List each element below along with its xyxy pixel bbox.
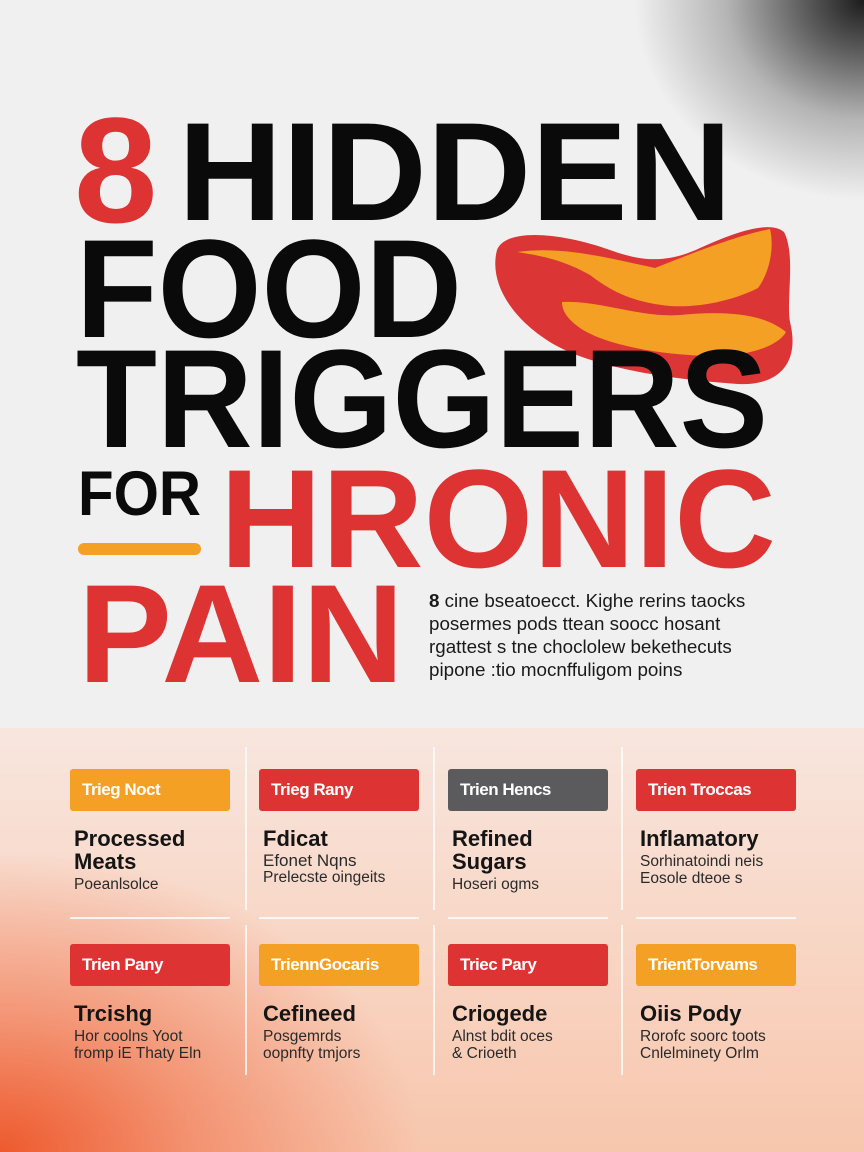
intro paragraph: posermes pods ttean soocc hosant (429, 613, 720, 634)
card 4 (636, 769, 796, 887)
card 1: Meats (74, 849, 136, 874)
card 7: Triec Pary (460, 955, 536, 974)
title: HIDDEN (178, 93, 732, 250)
card 8 (636, 944, 796, 1062)
card 4: Eosole dteoe s (640, 870, 743, 887)
intro paragraph: 8 cine bseatoecct. Kighe rerins taocks (429, 590, 745, 611)
card 1: Trieg Noct (82, 780, 160, 799)
card 3: Sugars (452, 849, 527, 874)
card 7: Criogede (452, 1001, 547, 1026)
card 6: Posgemrds (263, 1028, 341, 1045)
card 2: Efonet Nqns (263, 851, 357, 870)
card 1 (70, 769, 230, 893)
card 5: Trien Pany (82, 955, 163, 974)
title: HRONIC (220, 440, 776, 597)
card 2: Trieg Rany (271, 780, 353, 799)
card 3: Hoseri ogms (452, 876, 539, 893)
background: lower peach section (0, 728, 864, 1152)
title (74, 86, 793, 712)
card 1: Poeanlsolce (74, 876, 158, 893)
card 6: TriennGocaris (271, 955, 379, 974)
title: 8 (74, 86, 157, 254)
card 5 (70, 944, 230, 1062)
background: top corner shading (0, 0, 864, 730)
card 5: Trcishg (74, 1001, 152, 1026)
card 7: & Crioeth (452, 1045, 517, 1062)
card 4: Inflamatory (640, 826, 759, 851)
card 3: Refined (452, 826, 533, 851)
card 3 (448, 769, 608, 893)
card 2 (259, 769, 419, 886)
card 8: TrientTorvams (648, 955, 757, 974)
card 4: Trien Troccas (648, 780, 751, 799)
card 5: Hor coolns Yoot (74, 1028, 183, 1045)
title: PAIN (78, 555, 404, 712)
card 2: Prelecste oingeits (263, 869, 385, 886)
card 6: oopnfty tmjors (263, 1045, 360, 1062)
card 2: Fdicat (263, 826, 328, 851)
title: FOR (78, 459, 201, 529)
intro paragraph: rgattest s tne choclolew bekethecuts (429, 636, 732, 657)
card 8: Oiis Pody (640, 1001, 741, 1026)
card 6: Cefineed (263, 1001, 356, 1026)
icon: hot dog (495, 227, 793, 384)
intro paragraph (429, 590, 745, 680)
card 1: Processed (74, 826, 185, 851)
card 6 (259, 944, 419, 1062)
card 4: Sorhinatoindi neis (640, 853, 763, 870)
title: TRIGGERS (76, 320, 768, 477)
card 8: Cnlelminety Orlm (640, 1045, 759, 1062)
card 7 (448, 944, 608, 1062)
title: FOOD (76, 210, 462, 367)
intro paragraph: pipone :tio mocnffuligom poins (429, 659, 682, 680)
card 3: Trien Hencs (460, 780, 551, 799)
card 5: fromp iE Thaty Eln (74, 1045, 201, 1062)
card 7: Alnst bdit oces (452, 1028, 553, 1045)
dividers (245, 747, 247, 910)
card 8: Rorofc soorc toots (640, 1028, 766, 1045)
